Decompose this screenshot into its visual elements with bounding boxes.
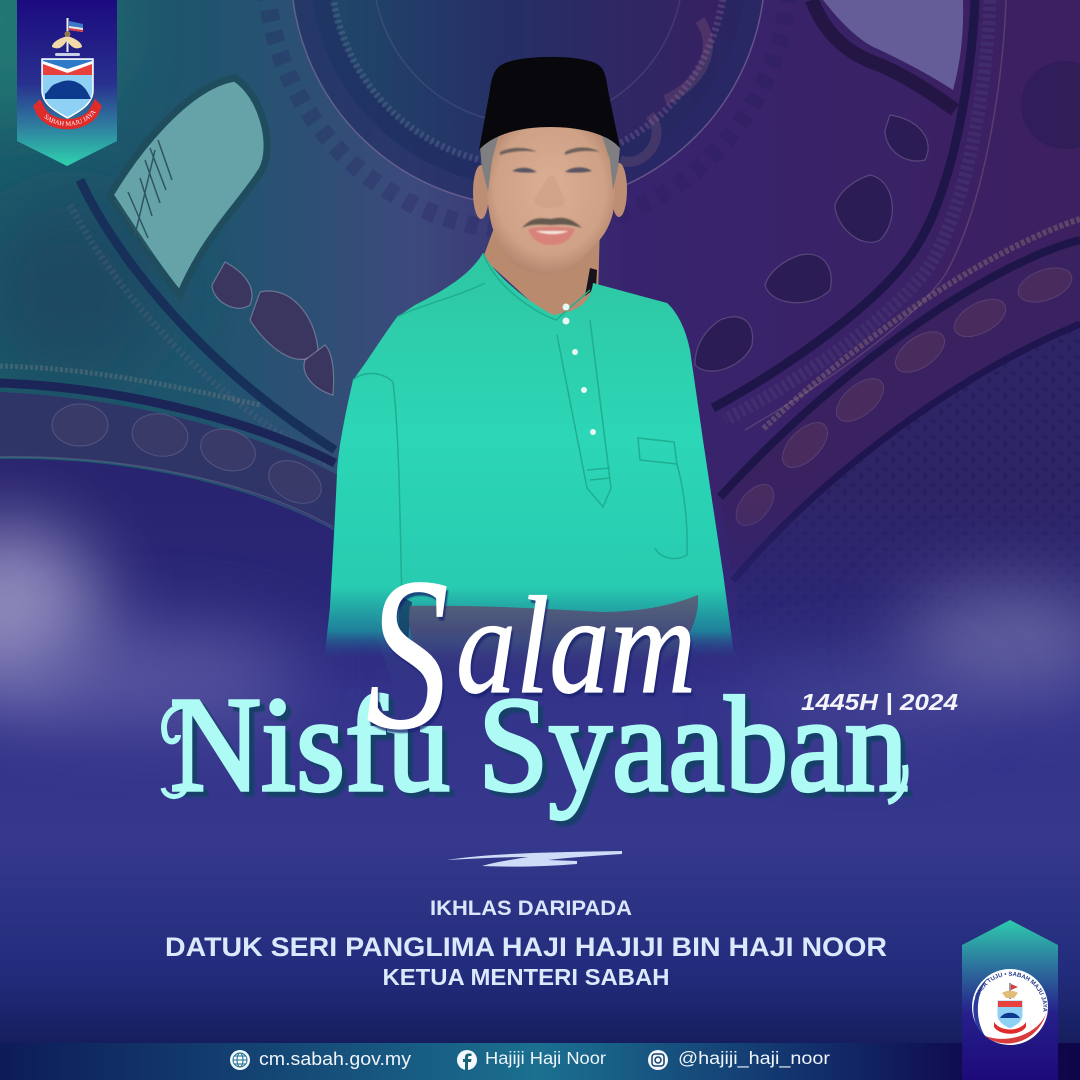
right upper arch — [713, 0, 1080, 430]
fade to navy and fog — [0, 480, 1080, 1080]
facebook name: Hajiji Haji Noor — [485, 1048, 606, 1068]
left spandrel ornaments — [212, 262, 334, 395]
heading: Nisfu Syaaban: Syaaban — [478, 670, 908, 820]
central medallion — [266, 0, 790, 231]
buttons — [562, 304, 596, 435]
Sabah coat of arms — [33, 18, 102, 130]
left lobed band — [0, 392, 340, 532]
heading: Nisfu Syaaban: Syaaban — [483, 675, 913, 825]
right spandrel ornaments — [695, 115, 928, 371]
heading: Nisfu Syaaban — [163, 670, 913, 825]
motto scroll — [33, 99, 102, 129]
lower left dark dome — [0, 459, 420, 760]
neck — [483, 225, 600, 322]
heading: Nisfu Syaaban: Nisfu — [175, 675, 455, 825]
logo ribbon top-left — [17, 0, 117, 166]
instagram handle: @hajiji_haji_noor — [678, 1048, 830, 1069]
heading: Salam — [366, 532, 698, 778]
icon: globe — [230, 1050, 250, 1070]
year label: 1445H | 2024 — [801, 689, 958, 715]
shirt — [324, 253, 738, 662]
Sabah coat of arms: SABAH MAJU JAYA — [44, 110, 96, 126]
left band edges — [0, 366, 335, 527]
songkok — [479, 57, 620, 150]
heading: Nisfu Syaaban: Nisfu — [170, 670, 450, 820]
right band edges — [720, 240, 1080, 497]
heading: Salam: S — [368, 536, 451, 778]
Hala Tuju badge — [972, 969, 1048, 1045]
face — [485, 120, 615, 274]
Hala Tuju badge: HALA TUJU • SABAH MAJU JAYA — [974, 972, 1048, 1012]
text: sender name: DATUK SERI PANGLIMA HAJI HAJIJI BIN HAJI NOOR — [165, 932, 887, 962]
logo ribbon bottom-right — [962, 920, 1058, 1080]
heading: Salam: alam — [458, 572, 698, 726]
text: ikhlas daripada: IKHLAS DARIPADA — [430, 897, 632, 920]
window arch frame — [812, 0, 955, 110]
footer bar — [0, 1043, 1080, 1080]
text: sender title: KETUA MENTERI SABAH — [382, 964, 670, 990]
left arch — [70, 180, 335, 465]
heading: Salam: S — [366, 532, 449, 774]
right band lobes — [729, 261, 1076, 532]
left window — [110, 78, 267, 295]
window antenna — [115, 140, 172, 252]
sleeve and placket folds — [353, 253, 687, 600]
ears — [473, 165, 489, 219]
grey hair — [480, 130, 620, 192]
neck shadow — [585, 268, 597, 296]
heading: Salam: alam — [456, 568, 696, 722]
background: mosque dome interior — [0, 0, 1080, 760]
icon: facebook — [457, 1050, 477, 1070]
right lobed band — [720, 240, 1080, 581]
top-right medallion — [1021, 61, 1080, 149]
portrait: man in green baju melayu — [324, 57, 738, 680]
website: cm.sabah.gov.my — [259, 1049, 411, 1069]
left shadow — [0, 200, 160, 380]
lower right dome — [735, 328, 1080, 740]
top-right window — [823, 0, 963, 90]
icon: instagram — [648, 1050, 668, 1070]
facial features — [500, 148, 600, 245]
brush divider — [447, 851, 622, 867]
left band lobes — [52, 404, 329, 512]
darker sleeve gap — [398, 596, 412, 640]
sash — [409, 595, 698, 680]
top-left glow — [0, 0, 110, 120]
